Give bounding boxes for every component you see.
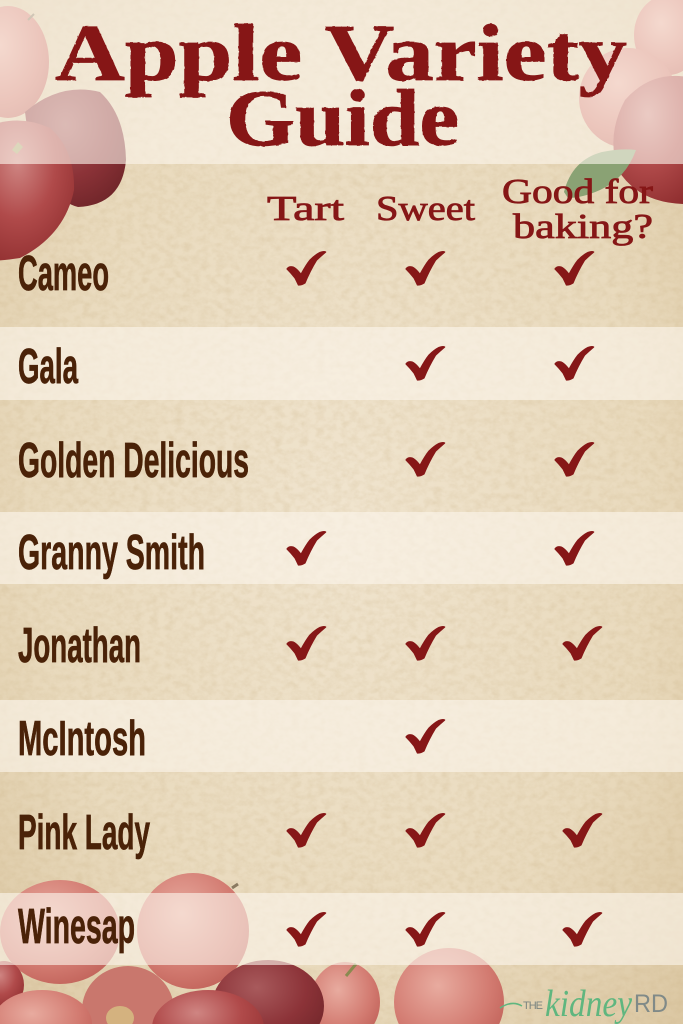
row: Gala xyxy=(18,340,594,394)
row: Winesap xyxy=(18,900,602,954)
logo: The Kidney RD xyxy=(500,983,668,1024)
apples: bottom pile xyxy=(0,873,504,1024)
row: Jonathan: Jonathan xyxy=(18,619,141,673)
row: Cameo xyxy=(18,247,594,301)
header: good for baking: Good for xyxy=(502,172,653,211)
title: Guide xyxy=(226,75,459,163)
apples: top right cluster xyxy=(564,0,683,204)
row: McIntosh xyxy=(18,712,445,766)
row: Golden Delicious xyxy=(18,434,594,488)
apples: top left cluster xyxy=(0,6,126,261)
logo: The Kidney RD: kidney xyxy=(545,983,632,1024)
leaf xyxy=(564,149,636,198)
header: good for baking xyxy=(502,172,653,246)
title: Apple Variety xyxy=(55,10,627,98)
header: good for baking: baking? xyxy=(513,207,653,246)
row: Cameo: Cameo xyxy=(18,247,109,301)
row: Golden Delicious: Golden Delicious xyxy=(18,434,249,488)
row: Pink Lady: Pink Lady xyxy=(18,806,150,860)
column headers xyxy=(267,172,653,246)
row: Winesap: Winesap xyxy=(18,900,135,954)
row: Jonathan xyxy=(18,619,602,673)
logo: The Kidney RD: THE xyxy=(523,1000,543,1012)
header: sweet: Sweet xyxy=(376,189,475,228)
row: Gala: Gala xyxy=(18,340,78,394)
row: McIntosh: McIntosh xyxy=(18,712,146,766)
row: Pink Lady xyxy=(18,806,602,860)
row: Granny Smith: Granny Smith xyxy=(18,526,205,580)
row: Granny Smith xyxy=(18,526,594,580)
title xyxy=(55,10,627,163)
logo: The Kidney RD: RD xyxy=(634,990,668,1018)
header: tart: Tart xyxy=(267,189,344,228)
